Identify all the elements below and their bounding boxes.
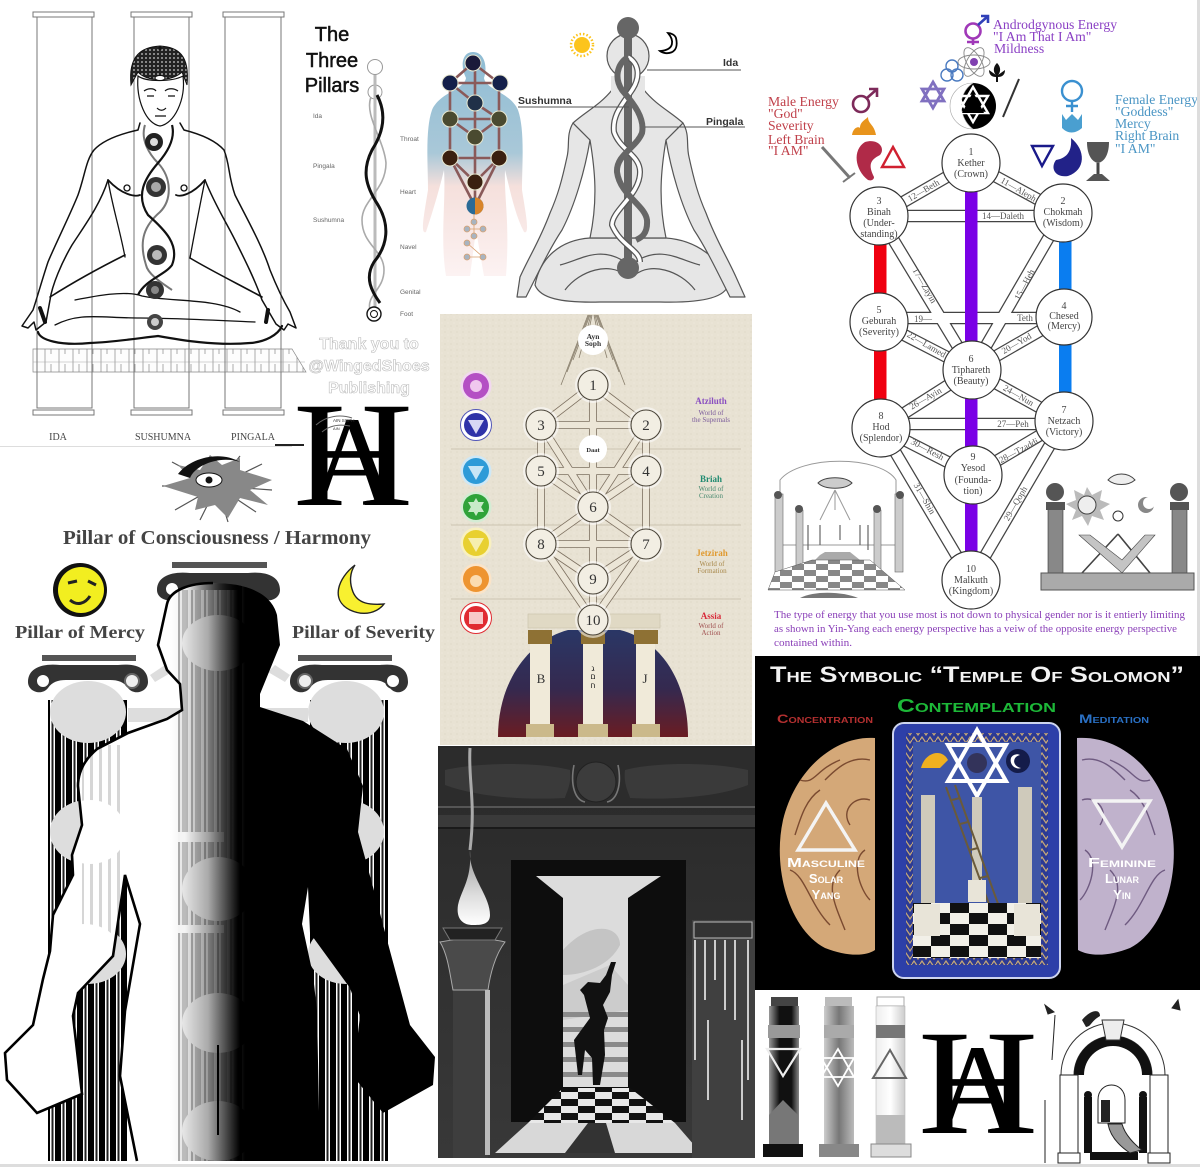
mercy pillar blue	[1059, 213, 1072, 421]
sun emblem	[921, 753, 948, 768]
path labels: Teth	[1017, 313, 1033, 323]
left brain	[780, 738, 875, 955]
pillar: Pingala	[223, 12, 284, 415]
world label: Jetzirah: World of	[700, 560, 725, 568]
sephirah names: 3	[876, 196, 882, 207]
ladder	[946, 785, 1001, 915]
checkerboard floor	[528, 1088, 675, 1123]
icon: blue triangle	[1032, 146, 1053, 166]
tree nodes	[442, 55, 508, 190]
panel: kabbalah tree over body	[423, 52, 527, 276]
figure shadow	[565, 1123, 615, 1153]
spine and energy balls	[617, 17, 639, 279]
tree paths	[541, 385, 646, 620]
flame and smoke	[458, 748, 490, 925]
right capital	[290, 655, 408, 692]
heading: The Symbolic “Temple Of Solomon”	[770, 662, 1184, 687]
sephirah names: 7	[1062, 405, 1066, 416]
icon: purple hexagram	[922, 82, 944, 108]
center stripes	[178, 590, 240, 1161]
world label: Jetzirah	[696, 548, 728, 575]
pillar spheres right	[308, 681, 384, 984]
panel: pillars of mercy consciousness severity	[5, 455, 435, 1161]
world label: Jetzirah: Jetzirah	[696, 548, 728, 558]
feminine lunar yin: Yin	[1113, 887, 1131, 902]
mid column with hexagram	[819, 997, 859, 1157]
tarot card	[893, 723, 1060, 978]
sephirah names: 9	[970, 452, 976, 463]
path labels: 26—Ayin	[908, 385, 944, 412]
sephirot nodes: 4	[642, 464, 650, 480]
male energy text	[768, 94, 839, 158]
pillar labels: PINGALA	[231, 432, 276, 443]
left lotus column	[440, 928, 505, 1158]
human silhouette half light half dark	[5, 583, 435, 1161]
spiral stairs	[563, 929, 628, 1077]
panel: The Three Pillars diagram	[305, 24, 421, 321]
center spheres	[182, 615, 243, 1161]
female energy text: "Goddess"	[1115, 104, 1173, 119]
sephirot nodes: 10	[586, 613, 600, 629]
malkuth node	[466, 198, 484, 214]
icon: atom	[958, 45, 990, 79]
hebrew letters: ם	[590, 672, 596, 681]
icon: black star disc	[950, 83, 996, 129]
feminine lunar yin: Feminine	[1088, 855, 1156, 870]
center white breaks	[178, 832, 224, 933]
panel: tree of life on parchment	[440, 314, 752, 745]
path labels: 29—Qoph	[1002, 484, 1029, 522]
path labels: 14—Daleth	[982, 211, 1024, 221]
chakra: third eye	[460, 410, 492, 440]
icon: red triangle	[882, 147, 904, 167]
sephirah names: Chokmah	[1044, 207, 1082, 218]
panel: yogi with three pillars	[22, 12, 306, 443]
chakra: throat	[460, 456, 492, 486]
label leader lines	[518, 70, 745, 127]
monogram logo top: A	[307, 391, 399, 533]
icon: wand	[1003, 79, 1019, 117]
male energy text: Severity	[768, 118, 814, 133]
lintel	[528, 614, 660, 628]
title: The	[315, 24, 349, 46]
channel labels: Ida	[723, 57, 738, 69]
androgynous energy text: "I Am That I Am"	[993, 29, 1091, 44]
title: Pillars	[305, 75, 359, 97]
sephirah names: 5	[876, 305, 882, 316]
helix labels: Genital	[400, 289, 421, 296]
world label: Atziluth: Atziluth	[695, 396, 727, 406]
pillars	[526, 630, 660, 737]
icon: sword	[822, 147, 855, 182]
sephirah names: Yesod	[961, 463, 985, 474]
world label: Assia: Assia	[701, 611, 722, 621]
sephirot nodes: 9	[589, 572, 597, 588]
light column with fire triangle	[871, 997, 911, 1157]
pillar labels: IDA	[49, 432, 68, 443]
pillar labels	[49, 432, 276, 443]
card columns	[921, 787, 1032, 903]
masculine solar yang	[787, 855, 865, 902]
panel: three triangle columns	[763, 997, 911, 1157]
sephirot nodes: Ayn	[587, 332, 600, 341]
left capital	[28, 655, 148, 692]
right brain	[1077, 738, 1174, 955]
all seeing eye	[162, 455, 272, 522]
ayn soph rays	[561, 315, 625, 385]
feminine lunar yin: Lunar	[1105, 871, 1139, 886]
pillar letters	[537, 671, 648, 686]
panel: temple doorway painting	[438, 746, 755, 1158]
sephirah names: Hod	[872, 422, 890, 433]
masculine solar yang: Masculine	[787, 855, 865, 870]
pedestals	[914, 880, 1040, 936]
explanatory note: The type of energy that you use most is not down to physical gender nor is it entierly limiting	[774, 609, 1185, 621]
ghost stripes on light arm	[82, 745, 120, 933]
sun	[571, 34, 593, 56]
sephirot nodes: 3	[537, 418, 545, 434]
path labels: 31—Shin	[912, 481, 938, 516]
pillar spheres left	[50, 681, 126, 984]
sephirah names: 4	[1062, 301, 1066, 312]
female energy text	[1115, 92, 1198, 156]
world label: Atziluth: World of	[699, 409, 724, 417]
label: contemplation: Contemplation	[897, 696, 1056, 716]
channel labels	[518, 57, 744, 128]
icon: water crown	[1062, 114, 1082, 132]
sephirah names: 8	[878, 411, 884, 422]
male energy text: "I AM"	[768, 143, 808, 158]
icon: red yin	[857, 141, 882, 180]
center pillar glimpsed through figure	[82, 583, 243, 1161]
feminine lunar yin	[1088, 855, 1156, 902]
sephirot nodes	[523, 325, 664, 638]
sephirah names: Netzach	[1048, 416, 1080, 427]
world label: Briah: Creation	[699, 492, 724, 500]
helix labels: Navel	[400, 244, 417, 251]
sephirot nodes: 6	[589, 500, 597, 516]
panel: tree of life with energies	[768, 16, 1198, 649]
sephirah names: 6	[968, 354, 974, 365]
sephirot nodes: 1	[589, 378, 597, 394]
icon: triquetra	[941, 60, 963, 81]
center fade to black	[188, 583, 242, 1161]
right pillar shaft	[310, 700, 388, 1161]
sephirah names: (Under-	[863, 218, 895, 229]
icon: blue yin	[1053, 138, 1082, 176]
helix labels: Heart	[400, 189, 416, 196]
pillar letters: J	[642, 671, 648, 686]
sephirah names	[859, 147, 1083, 597]
body silhouette	[423, 52, 527, 276]
helix labels: Sushumna	[313, 217, 344, 224]
sephirah nodes	[850, 134, 1093, 609]
path labels: 28—Tzaddi	[997, 436, 1040, 465]
sephirah names: (Crown)	[954, 169, 988, 180]
sephirah names: (Severity)	[859, 327, 899, 338]
watermark credit: Publishing	[328, 380, 410, 397]
sephirah names: (Beauty)	[954, 376, 988, 387]
small overlaid label in monogram	[275, 416, 355, 445]
female energy text: "I AM"	[1115, 141, 1155, 156]
world label: Atziluth	[692, 396, 730, 424]
silhouette outline left	[5, 583, 213, 1161]
explanatory note	[774, 609, 1185, 649]
helix labels	[313, 113, 421, 318]
path labels	[905, 175, 1040, 522]
small overlaid label in monogram: AIN	[333, 426, 340, 431]
sephirah names: Tiphareth	[952, 365, 990, 376]
world label: Jetzirah: Formation	[697, 567, 727, 575]
hebrew letters	[590, 664, 596, 690]
triangle: masculine	[798, 803, 855, 850]
dome of stars	[498, 630, 688, 737]
climbing figure	[574, 962, 616, 1085]
path labels: 12—Beth	[906, 177, 942, 203]
world label: Atziluth: the Supernals	[692, 416, 730, 424]
center capital	[157, 562, 280, 600]
path labels: 27—Peh	[997, 419, 1029, 429]
icon: androgynous symbol	[966, 16, 988, 45]
panel: meditating figure with Ida Pingala Sushumna	[517, 17, 745, 302]
cushion	[33, 349, 306, 372]
small overlaid label in monogram: AIN SOPH	[333, 418, 355, 423]
sephirah names: (Splendor)	[860, 433, 902, 444]
male energy text: Male Energy	[768, 94, 839, 109]
channel labels: Sushumna	[518, 95, 572, 107]
female energy text: Mercy	[1115, 116, 1151, 131]
severity pillar red	[874, 216, 886, 428]
sephirah names: (Wisdom)	[1043, 218, 1083, 229]
path labels: 11—Aleph	[999, 175, 1039, 204]
chakra: sacral	[460, 564, 492, 594]
pillar: Sushumna	[131, 12, 192, 415]
world divider lines	[451, 449, 741, 599]
tree paths inner	[879, 163, 1064, 580]
tree paths	[450, 63, 499, 206]
world label: Assia: World of	[699, 622, 724, 630]
right column with drips	[692, 920, 755, 1158]
monogram logo top: H	[293, 372, 413, 538]
sephirot nodes: 7	[642, 537, 650, 553]
watermark credit: @WingedShoes	[308, 358, 430, 375]
grey connector bars	[128, 665, 308, 722]
sephirah names: (Victory)	[1046, 427, 1082, 438]
engraving: masonic lodge	[768, 461, 905, 598]
world label: Briah: World of	[699, 485, 724, 493]
moon	[660, 33, 677, 53]
masculine solar yang: Yang	[812, 887, 840, 902]
hebrew letters: ח	[590, 681, 596, 690]
chakra: crown	[460, 370, 492, 402]
path labels: 22—Lamed	[905, 329, 948, 360]
path labels: 20—Yod	[1000, 331, 1034, 356]
androgynous energy text: Androdgynous Energy	[993, 17, 1117, 32]
sephirah names: Malkuth	[954, 575, 988, 586]
heading: mercy: Pillar of Mercy	[15, 622, 145, 642]
female energy text: Right Brain	[1115, 128, 1179, 143]
sephirah names: standing)	[860, 229, 898, 240]
frieze with winged disk	[440, 748, 755, 806]
female energy text: Female Energy	[1115, 92, 1198, 107]
world label: Briah	[699, 474, 724, 500]
androgynous energy text: Mildness	[994, 41, 1044, 56]
helix	[612, 57, 647, 262]
icon: male symbol	[853, 89, 877, 112]
path labels: 24—Nun	[1001, 383, 1036, 408]
chakra: root	[460, 602, 492, 634]
path labels: 19—	[914, 314, 933, 324]
sephirot nodes: 8	[537, 537, 545, 553]
pillar labels: SUSHUMNA	[135, 432, 192, 443]
icon: fire	[852, 117, 876, 135]
monogram logo bottom: A	[932, 1019, 1024, 1161]
dark column with water triangle	[763, 997, 803, 1157]
sephirah names: Chesed	[1049, 311, 1079, 322]
helix labels: Throat	[400, 136, 419, 143]
sephirot nodes: 5	[537, 464, 545, 480]
icon: fleur de lis	[989, 63, 1005, 82]
sephirah names: 1	[968, 147, 974, 158]
left pillar shaft	[48, 700, 128, 1161]
helix channels	[362, 60, 386, 321]
icon: venus symbol	[1062, 81, 1082, 112]
path labels: 30—Resh	[909, 436, 946, 462]
icon: crescent moon	[338, 565, 384, 613]
panel: symbolic temple of solomon	[755, 656, 1200, 990]
center fissure	[217, 1045, 219, 1135]
hebrew letters: ג	[591, 664, 595, 673]
helix labels: Pingala	[313, 163, 335, 170]
icon: chalice	[1086, 142, 1110, 181]
world label: Assia: Action	[701, 629, 721, 637]
sephirah names: Kether	[957, 158, 985, 169]
ghost spheres on light arm	[82, 800, 120, 975]
seated yogi figure	[22, 123, 296, 344]
tree paths outer	[879, 163, 1064, 580]
body	[517, 34, 745, 302]
lower nodes	[464, 214, 486, 260]
inner light opening	[536, 876, 661, 1087]
triangle: feminine	[1094, 801, 1150, 847]
serpent channels and chakras	[138, 125, 174, 330]
sephirot nodes: Soph	[585, 339, 602, 348]
helix labels: Foot	[400, 311, 413, 318]
engraving: arch and temple stairs	[1045, 1000, 1180, 1163]
explanatory note: as shown in Yin-Yang each energy perspective has a veiw of the opposite energy perspective	[774, 623, 1177, 635]
moon emblem	[1006, 749, 1030, 773]
icon: smiling sun	[53, 563, 107, 617]
sephirot nodes: Daat	[586, 447, 601, 454]
pillar letters: B	[537, 671, 546, 686]
hexagram	[948, 730, 1006, 796]
sephirah names: 2	[1060, 196, 1066, 207]
yogi head	[131, 46, 187, 126]
path labels: 17—Zayin	[911, 266, 939, 305]
engraving: masonic square and compass	[1041, 474, 1194, 590]
chequered floor	[913, 903, 1041, 958]
watermark credit: Thank you to	[319, 336, 419, 353]
monogram logo bottom: H	[918, 1000, 1038, 1166]
heading: consciousness: Pillar of Consciousness / Harmony	[63, 528, 371, 549]
sephirah names: tion)	[964, 486, 982, 497]
sephirah names: (Mercy)	[1048, 321, 1080, 332]
label: meditation: Meditation	[1079, 712, 1149, 726]
watermark credit	[308, 336, 430, 397]
label: concentration: Concentration	[777, 712, 873, 726]
male energy text: "God"	[768, 106, 803, 121]
explanatory note: contained within.	[774, 637, 852, 649]
pillar: Ida	[33, 12, 94, 415]
heading: severity: Pillar of Severity	[292, 622, 435, 642]
cornice	[438, 806, 755, 829]
sephirah names: Binah	[867, 207, 891, 218]
chakra: heart	[460, 492, 492, 522]
chakra: solar plexus	[460, 528, 492, 558]
sephirah names: 10	[966, 564, 976, 575]
helix labels: Ida	[313, 113, 322, 120]
masculine solar yang: Solar	[809, 871, 844, 886]
sephirah names: (Kingdom)	[949, 586, 993, 597]
light floor	[495, 1123, 701, 1153]
world label: Briah: Briah	[700, 474, 722, 484]
channel labels: Pingala	[706, 116, 744, 128]
male energy text: Left Brain	[768, 132, 825, 147]
androgynous energy text	[993, 17, 1117, 56]
sephirah names: (Founda-	[955, 475, 991, 486]
path labels: 15—Heh	[1012, 267, 1037, 302]
world label: Assia	[699, 611, 724, 637]
title: Three	[306, 50, 358, 72]
sephirah names: Geburah	[862, 316, 896, 327]
middle pillar purple	[965, 163, 978, 580]
title	[305, 24, 359, 97]
sephirot nodes: 2	[642, 418, 650, 434]
doorway	[511, 860, 686, 1122]
